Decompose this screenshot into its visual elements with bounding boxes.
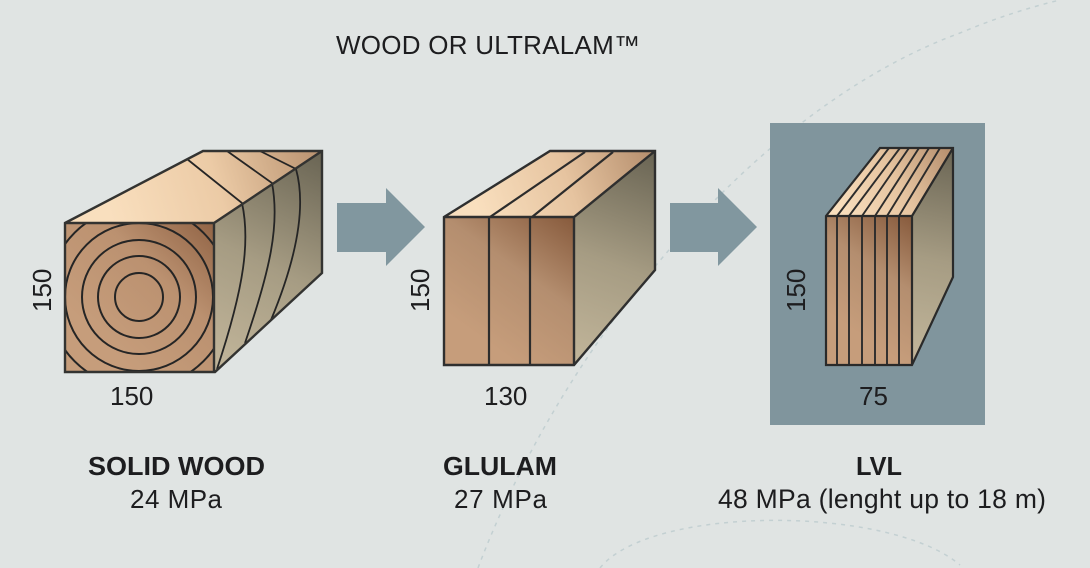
arrow: glulam to LVL bbox=[670, 188, 757, 266]
dotted arc: large bbox=[478, 0, 1060, 568]
side face bbox=[214, 151, 322, 372]
panel: LVL highlight bbox=[770, 123, 985, 425]
dimension: glulam height: 150 bbox=[405, 269, 435, 312]
front face with growth rings bbox=[66, 224, 213, 371]
glulam block illustration bbox=[444, 151, 655, 365]
dimension: LVL width: 75 bbox=[859, 381, 888, 411]
side face bbox=[574, 151, 655, 365]
label: LVL bbox=[718, 451, 1046, 514]
dimension: solid wood width: 150 bbox=[110, 381, 153, 411]
side face bbox=[912, 148, 953, 365]
block outline bbox=[444, 151, 655, 365]
label: solid wood: SOLID WOOD bbox=[88, 451, 265, 481]
title: WOOD OR ULTRALAM™ bbox=[336, 30, 640, 60]
front face bbox=[826, 216, 912, 365]
top face bbox=[444, 151, 655, 217]
block outline bbox=[65, 151, 322, 372]
arrow: solid wood to glulam bbox=[337, 188, 425, 266]
top face bbox=[65, 151, 322, 223]
label: LVL: 48 MPa (lenght up to 18 m) bbox=[718, 484, 1046, 514]
label: solid wood bbox=[88, 451, 265, 514]
veneer lines bbox=[837, 148, 940, 365]
dimension: solid wood height: 150 bbox=[27, 269, 57, 312]
block outline bbox=[826, 148, 953, 365]
top face bbox=[826, 148, 953, 216]
wood grain lines bbox=[187, 151, 300, 369]
label: glulam: GLULAM bbox=[443, 451, 557, 481]
label: glulam: 27 MPa bbox=[454, 484, 548, 514]
label: LVL: LVL bbox=[856, 451, 902, 481]
front face bbox=[444, 217, 574, 365]
LVL block illustration bbox=[826, 148, 953, 365]
dotted arc: lower bbox=[600, 520, 960, 568]
label: glulam bbox=[443, 451, 557, 514]
lamination lines bbox=[489, 152, 613, 365]
solid wood block illustration bbox=[64, 150, 324, 374]
dimension: glulam width: 130 bbox=[484, 381, 527, 411]
label: solid wood: 24 MPa bbox=[130, 484, 223, 514]
dimension: LVL height: 150 bbox=[781, 269, 811, 312]
